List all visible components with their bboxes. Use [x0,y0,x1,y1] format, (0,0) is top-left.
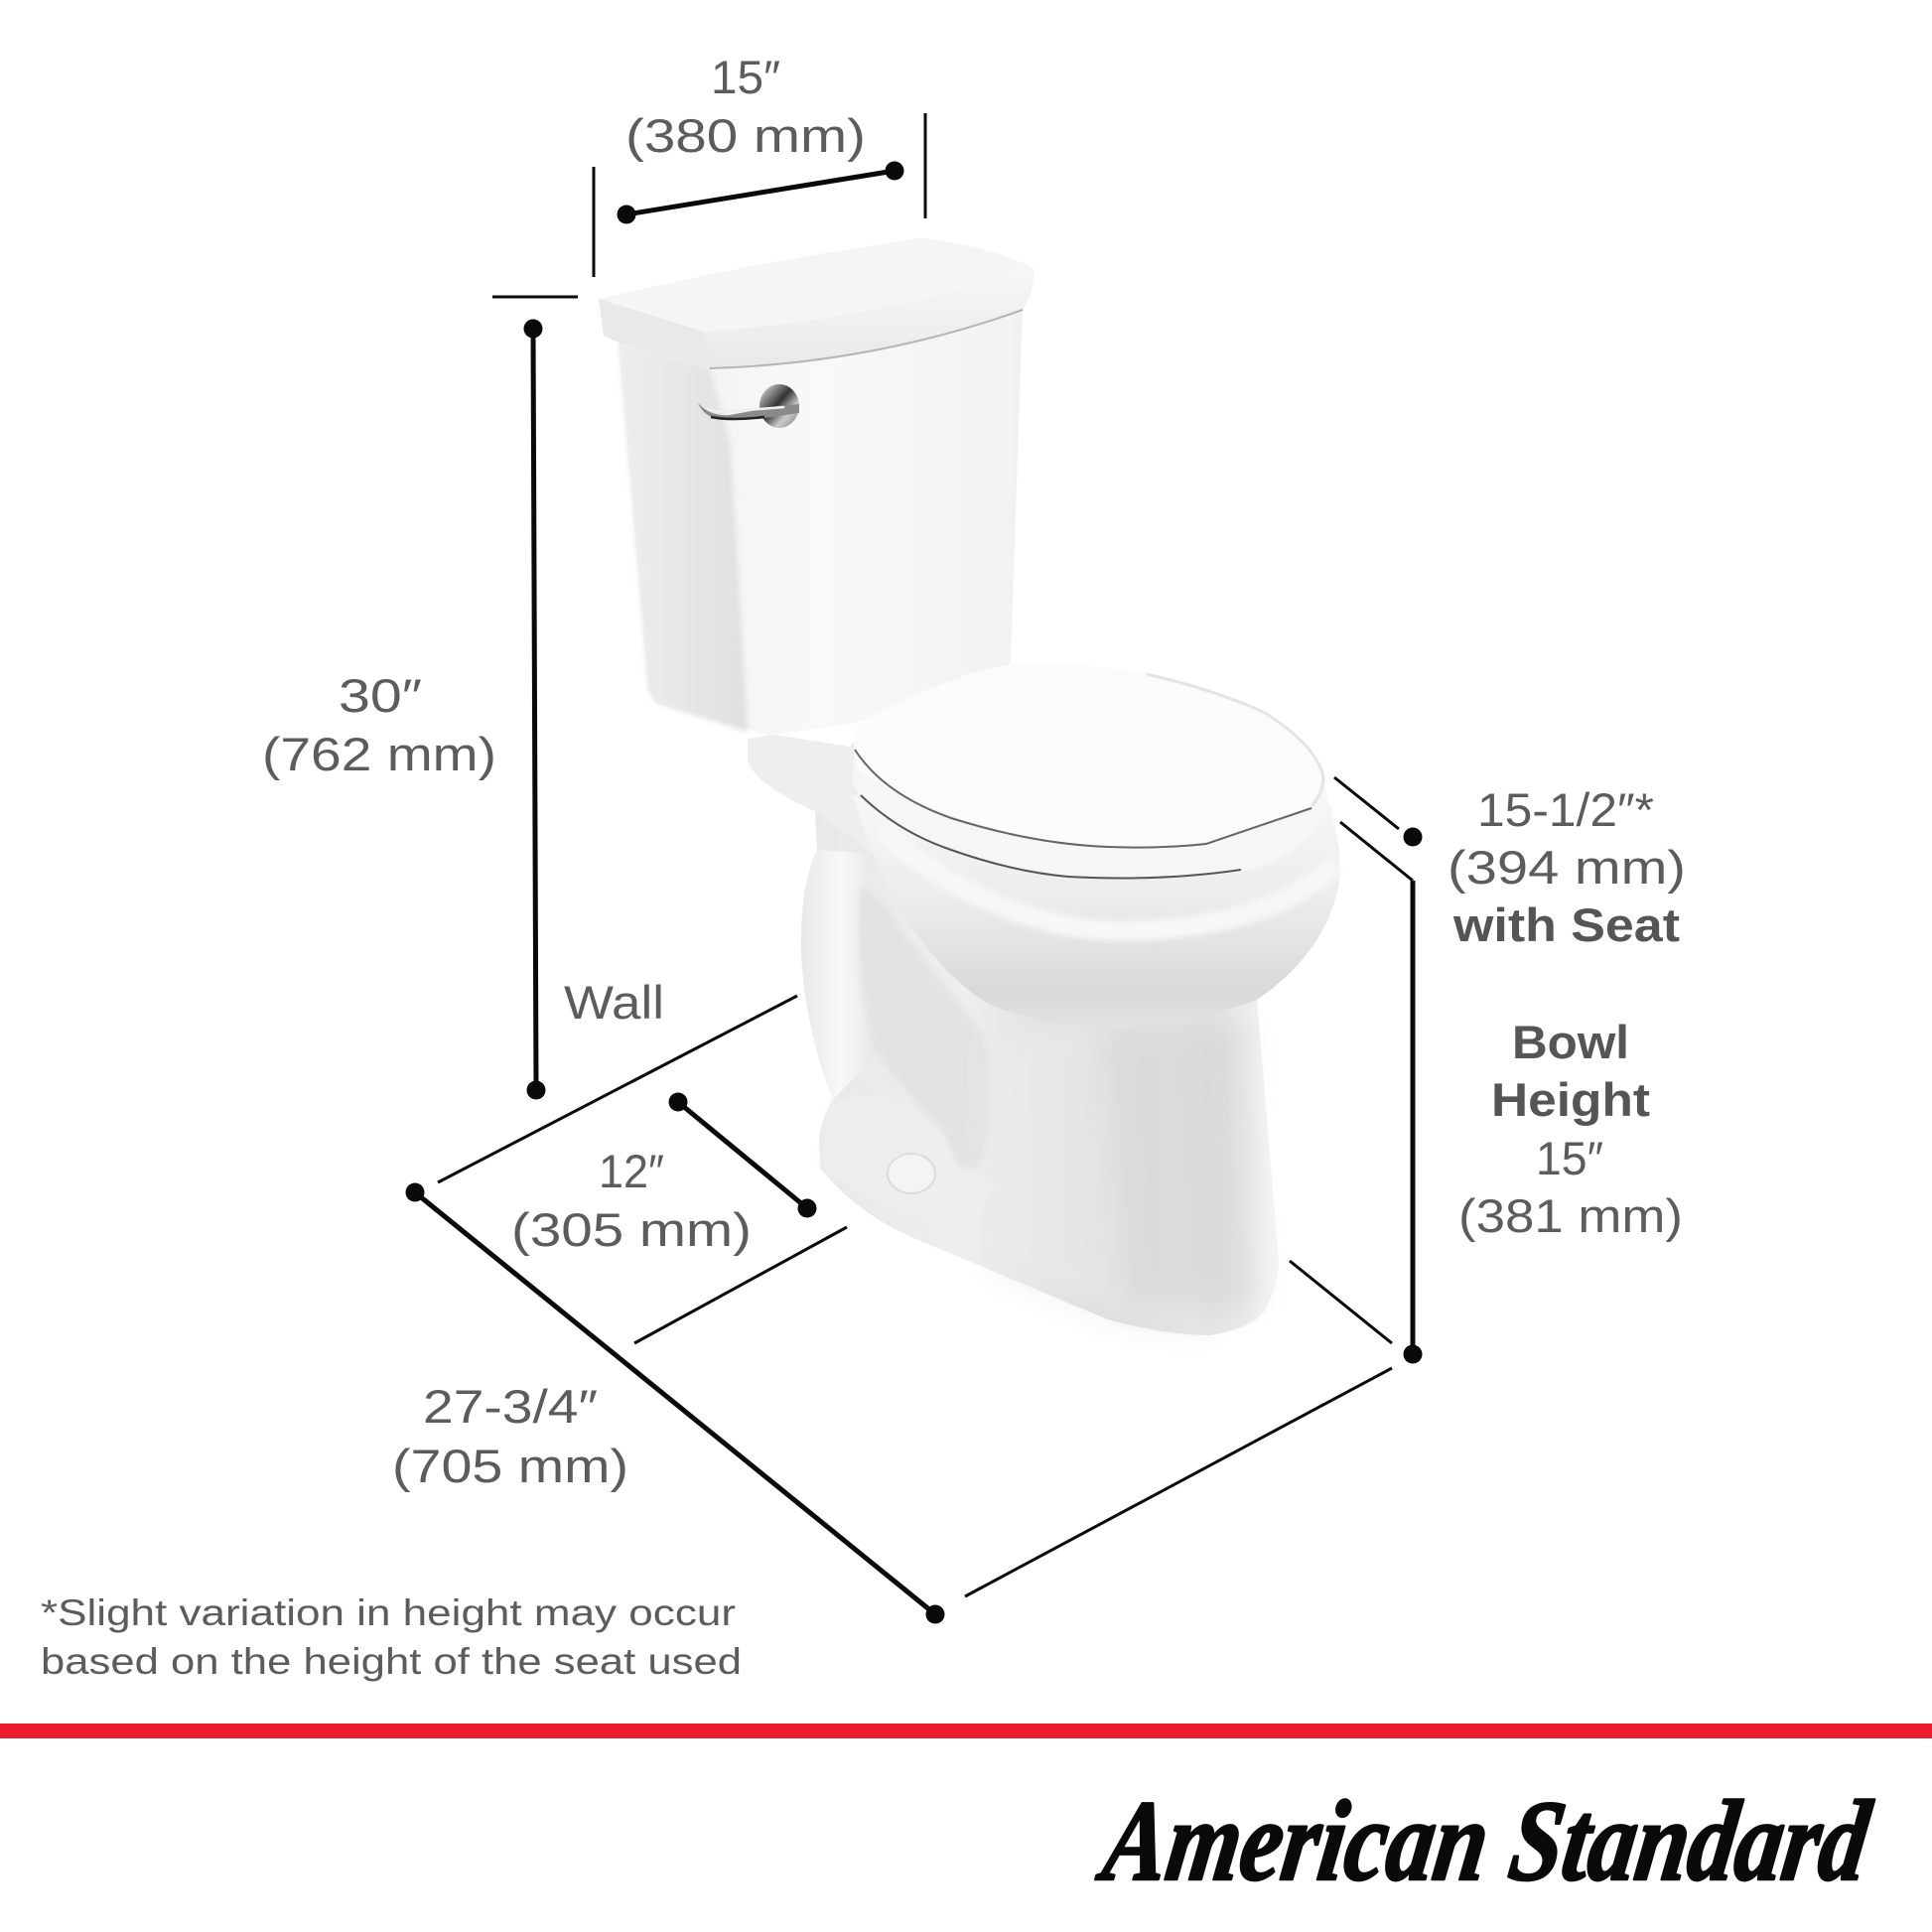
label: 15-1/2 in with seat: 15-1/2″* [1477,783,1654,836]
red divider bar [0,1724,1932,1738]
seat ring shadow line [861,795,1241,878]
footnote: *Slight variation in height may occur [41,1592,736,1633]
dimension: tank width 15 in [594,113,925,277]
seat lid [854,663,1323,848]
arrow line with dots [626,171,895,214]
label: 380 mm: (380 mm) [625,109,866,162]
tank [599,238,1035,735]
dimension: rough-in 12 in [634,1092,847,1343]
label: 762 mm: (762 mm) [262,728,496,780]
label: bowl height 15 in [1458,1016,1683,1242]
bowl [853,795,1339,1028]
seat lid rim tint [1147,674,1323,806]
label: bowl height 15 in: Height [1491,1073,1650,1126]
wall reference line [438,996,797,1182]
label: 15 in: 15″ [711,51,780,103]
label: 305 mm: (305 mm) [511,1203,752,1256]
footnote [41,1592,742,1682]
extension lines [594,113,925,277]
label: 705 mm: (705 mm) [392,1440,628,1492]
label: 15-1/2 in with seat: with Seat [1452,898,1680,951]
dimension: depth 27-3/4 in [405,1183,1392,1624]
toilet rear trapway and base [801,811,1279,1335]
label: 15-1/2 in with seat: (394 mm) [1448,841,1686,894]
label: 15-1/2 in with seat [1448,783,1686,951]
label: 30 in: 30″ [339,669,422,722]
label: wall: Wall [564,976,664,1029]
flush handle [698,384,799,428]
bowl rim highlight [879,829,1335,931]
neck connecting tank and bowl [748,735,898,874]
toilet illustration [599,238,1339,1335]
label: 27-3/4 in: 27-3/4″ [423,1380,598,1433]
footnote: based on the height of the seat used [41,1641,742,1682]
toilet seat ring [853,759,1329,879]
tank lid [599,238,1035,368]
label: 12 in: 12″ [599,1145,664,1197]
seat lid edge [855,750,1311,848]
dimension: bowl height [1290,777,1422,1364]
label: bowl height 15 in: 15″ [1536,1132,1603,1184]
label: bowl height 15 in: Bowl [1512,1016,1629,1068]
dimension: overall height 30 in [492,297,578,1100]
label: bowl height 15 in: (381 mm) [1458,1189,1683,1242]
